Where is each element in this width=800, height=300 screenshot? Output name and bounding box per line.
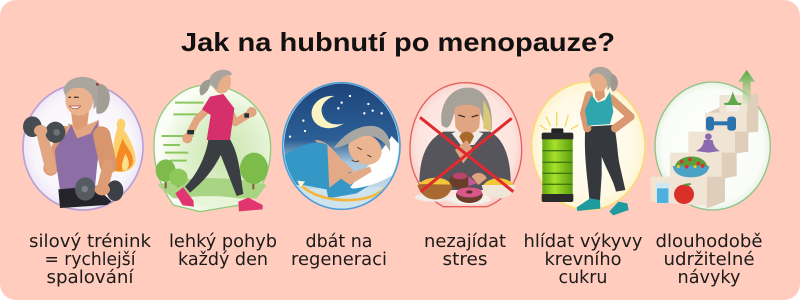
label: regeneration: dbát na	[306, 231, 372, 252]
label: blood sugar: krevního	[544, 249, 622, 270]
label: strength training: silový trénink	[29, 231, 152, 252]
label: sustainable habits: dlouhodobě	[656, 231, 762, 252]
label: stress eating: nezajídat	[424, 231, 506, 252]
label: regeneration	[291, 231, 387, 270]
label: sustainable habits	[656, 231, 762, 288]
label: stress eating	[424, 231, 506, 270]
label: strength training	[29, 231, 152, 288]
label: blood sugar: cukru	[558, 267, 608, 288]
label: light movement: každý den	[178, 249, 268, 270]
icon: sleep and regeneration	[280, 80, 403, 213]
label: sustainable habits: návyky	[678, 267, 741, 288]
label: sustainable habits: udržitelné	[664, 249, 754, 270]
icon: walking	[154, 70, 271, 212]
icon: strength training	[23, 77, 143, 210]
label: strength training: = rychlejší	[44, 249, 136, 270]
icon: no stress eating	[410, 83, 522, 207]
title: Jak na hubnutí po menopauze?	[181, 27, 615, 57]
label: strength training: spalování	[46, 267, 134, 288]
label: light movement: lehký pohyb	[169, 231, 277, 252]
label: light movement	[169, 231, 277, 270]
label: regeneration: regeneraci	[291, 249, 387, 270]
label: blood sugar: hlídat výkyvy	[524, 231, 643, 252]
icon: sustainable habits stairs	[651, 70, 770, 210]
label: stress eating: stres	[442, 249, 488, 270]
icon: blood sugar and energy	[532, 67, 645, 215]
label: blood sugar	[524, 231, 643, 288]
